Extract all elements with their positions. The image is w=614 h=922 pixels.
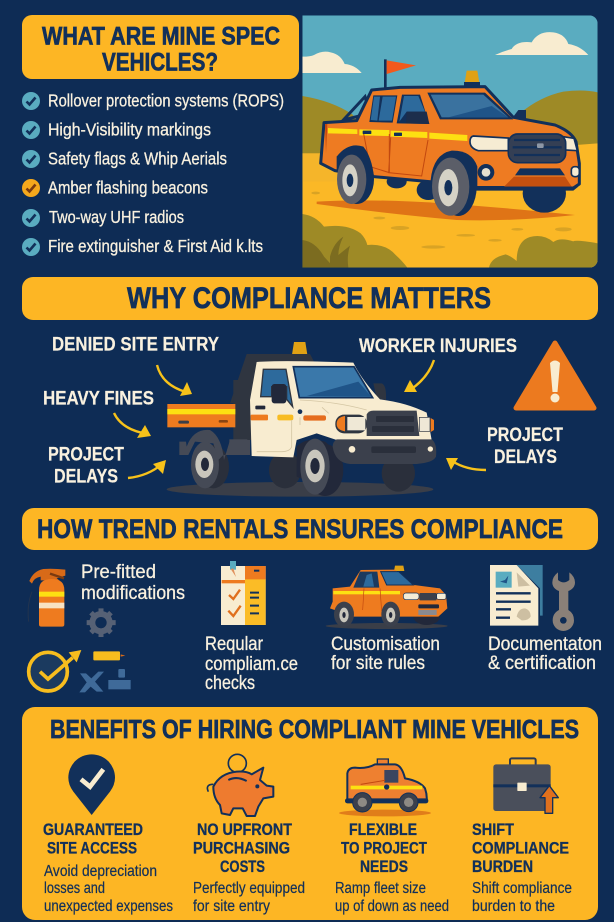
item: regular compliance checks: compliam.ce bbox=[205, 654, 298, 675]
item: regular compliance checks: checks bbox=[205, 673, 255, 694]
icon: target check with tools bbox=[29, 650, 131, 692]
item: documentation and certification: Documentaton bbox=[488, 634, 602, 655]
icon: fire extinguisher bbox=[28, 569, 65, 627]
checklist of features: High-Visibility markings bbox=[48, 120, 211, 140]
icon: warning triangle bbox=[516, 343, 594, 408]
checklist of features: Rollover protection systems (ROPS) bbox=[48, 90, 284, 110]
benefit: guaranteed site access: losses and bbox=[44, 880, 105, 897]
label: project delays right: DELAYS bbox=[494, 447, 557, 468]
item: customisation bbox=[326, 566, 448, 674]
benefit: guaranteed site access: SITE ACCESS bbox=[47, 840, 137, 858]
panel: compliance risks bbox=[43, 334, 594, 497]
label: project delays right bbox=[487, 425, 563, 468]
benefit: shift compliance burden: COMPLIANCE bbox=[472, 840, 569, 858]
benefit: flexible to project needs: TO PROJECT bbox=[341, 840, 427, 858]
benefit: no upfront purchasing costs: for site entry bbox=[193, 898, 270, 915]
label: heavy fines: HEAVY FINES bbox=[43, 388, 154, 410]
heading: what are mine spec vehicles: VEHICLES? bbox=[102, 48, 218, 76]
item: regular compliance checks bbox=[205, 561, 298, 694]
benefit: guaranteed site access: GUARANTEED bbox=[43, 821, 143, 839]
item: pre-fitted modifications: Pre-fitted bbox=[81, 562, 156, 583]
icon: checklist clipboard bbox=[221, 561, 266, 625]
item: documentation and certification: & certification bbox=[488, 653, 596, 674]
item: pre-fitted modifications bbox=[28, 562, 185, 692]
heading: why compliance matters bbox=[22, 277, 598, 320]
heading: what are mine spec vehicles bbox=[22, 15, 299, 79]
icon: piggy bank bbox=[207, 754, 273, 816]
wheels bbox=[191, 439, 333, 495]
benefit: guaranteed site access: Avoid depreciation bbox=[44, 863, 157, 880]
benefit: no upfront purchasing costs: COSTS bbox=[220, 858, 265, 876]
icon: small orange truck bbox=[326, 566, 448, 629]
illustration: white mine truck bbox=[167, 342, 436, 497]
icon: gear bbox=[87, 608, 116, 637]
item: documentation and certification bbox=[488, 565, 602, 674]
benefit: flexible to project needs: up of down as need bbox=[335, 898, 449, 915]
flag and beacon bbox=[384, 59, 480, 89]
label: project delays left: PROJECT bbox=[48, 444, 124, 466]
benefit: guaranteed site access bbox=[43, 754, 173, 915]
icon: briefcase with arrow bbox=[493, 758, 558, 813]
benefit: no upfront purchasing costs: PURCHASING bbox=[193, 840, 290, 858]
benefit: flexible to project needs bbox=[335, 759, 449, 915]
benefit: shift compliance burden: burden to the bbox=[472, 898, 555, 915]
benefit: no upfront purchasing costs bbox=[193, 754, 305, 915]
benefit: shift compliance burden: BURDEN bbox=[472, 858, 533, 876]
icon: document and wrench bbox=[490, 565, 575, 631]
benefit: shift compliance burden bbox=[472, 758, 572, 915]
item: pre-fitted modifications: modifications bbox=[81, 583, 185, 604]
checklist of features: Two-way UHF radios bbox=[49, 207, 184, 227]
label: worker injuries: WORKER INJURIES bbox=[359, 336, 517, 357]
headlights and grille bbox=[335, 411, 434, 436]
panel: what are mine spec vehicles bbox=[22, 15, 299, 256]
label: denied site entry: DENIED SITE ENTRY bbox=[52, 334, 219, 356]
benefit: no upfront purchasing costs: NO UPFRONT bbox=[197, 821, 292, 839]
item: regular compliance checks: Reqular bbox=[205, 634, 264, 655]
benefit: no upfront purchasing costs: Perfectly equipped bbox=[193, 880, 305, 897]
panel: how compliance is ensured bbox=[28, 561, 602, 694]
checklist of features: Safety flags & Whip Aerials bbox=[48, 148, 227, 168]
arrows pointing at truck bbox=[114, 360, 486, 478]
truck wheels bbox=[337, 155, 477, 216]
illustration: orange mine spec ute in landscape bbox=[302, 15, 598, 268]
checklist of features bbox=[22, 90, 284, 256]
heading: why compliance matters: WHY COMPLIANCE MATTERS bbox=[127, 282, 491, 315]
benefit: guaranteed site access: unexpected expenses bbox=[44, 898, 173, 915]
heading: what are mine spec vehicles: WHAT ARE MINE SPEC bbox=[42, 22, 280, 50]
benefit: flexible to project needs: NEEDS bbox=[360, 858, 408, 876]
icon: orange van bbox=[339, 759, 431, 816]
flatbed with stripes bbox=[167, 404, 235, 427]
benefit: shift compliance burden: SHIFT bbox=[472, 821, 514, 839]
benefit: flexible to project needs: FLEXIBLE bbox=[349, 821, 417, 839]
item: customisation: for site rules bbox=[331, 653, 425, 674]
benefit: flexible to project needs: Ramp fleet size bbox=[335, 880, 426, 897]
panel: benefits of hiring compliant mine vehicles bbox=[22, 707, 598, 920]
heading: how trend rentals ensures compliance bbox=[22, 508, 598, 550]
label: project delays left: DELAYS bbox=[54, 466, 118, 488]
label: project delays right: PROJECT bbox=[487, 425, 563, 446]
bumper bbox=[333, 439, 436, 464]
truck body bbox=[321, 87, 579, 213]
checklist of features: Fire extinguisher & First Aid k.lts bbox=[48, 236, 263, 256]
item: customisation: Customisation bbox=[331, 634, 440, 655]
label: project delays left bbox=[48, 444, 124, 488]
checklist of features: Amber flashing beacons bbox=[48, 178, 208, 198]
icon: location pin check bbox=[68, 754, 115, 815]
cab bbox=[250, 361, 432, 457]
benefit: shift compliance burden: Shift compliance bbox=[472, 880, 572, 897]
